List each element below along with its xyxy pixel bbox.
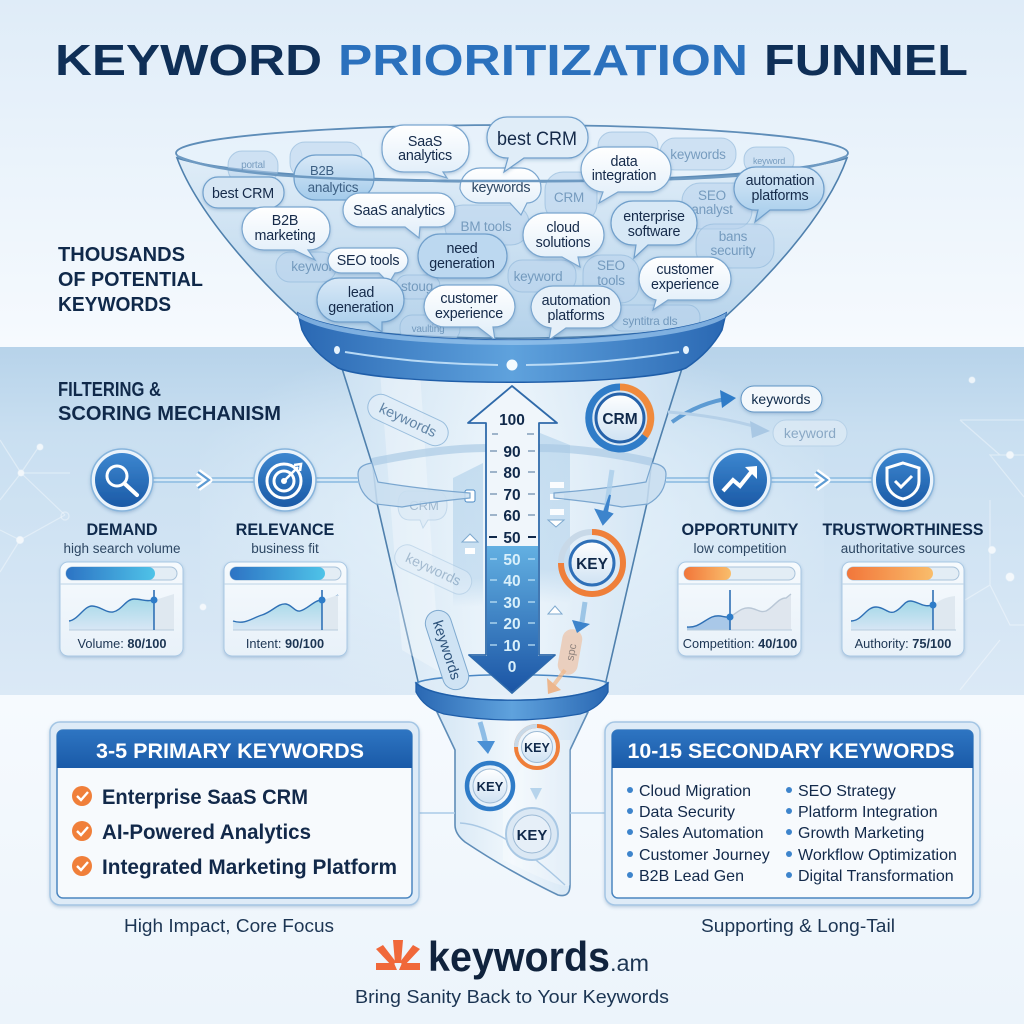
ring front left (358, 463, 470, 507)
CRM score badge: CRM (602, 411, 638, 428)
bubble: best CRM left (203, 177, 284, 208)
keyword list column two: Platform Integration (798, 804, 938, 821)
caption: primary: High Impact, Core Focus (124, 916, 334, 936)
pill: faded keyword (773, 420, 847, 446)
bubble: B2B analytics (behind rim): B2B (310, 163, 334, 178)
bubble: SEO tools: SEO (597, 258, 625, 273)
bubble: customer experience right (639, 257, 731, 310)
heading: TRUSTWORTHINESS (822, 521, 984, 539)
bubble: stoug: stoug (401, 279, 433, 294)
bubble: BM tools: BM tools (461, 219, 512, 234)
keyword list column one (627, 783, 770, 885)
heading: DEMAND (86, 521, 158, 539)
tag: orange pill: spc (565, 642, 579, 662)
decorative network background (0, 377, 1024, 690)
bubble: cloud solutions: solutions (536, 235, 590, 251)
caption: secondary: Supporting & Long-Tail (701, 916, 895, 936)
bubble: cloud solutions (523, 213, 604, 267)
bubble: SaaS analytics top: analytics (398, 148, 452, 164)
score scale double arrow: 20 (503, 616, 521, 633)
chevron arrow right (816, 472, 827, 488)
bubble: automation platforms: platforms (548, 308, 605, 324)
title: FUNNEL (764, 36, 968, 85)
bubble: SEO analyst (682, 183, 752, 229)
rim front arc (177, 156, 847, 181)
bubble: synthtra dls: syntitra dls (623, 314, 678, 328)
arrow: KEY down (572, 602, 590, 633)
bubble: data integration: integration (592, 168, 657, 184)
KEY score badge: KEY (576, 556, 609, 573)
bubble: keywor: keywor (291, 259, 333, 274)
tag: orange pill (556, 628, 584, 676)
ring back (372, 448, 652, 462)
bubble: B2B marketing: B2B (272, 213, 298, 229)
filter: trustworthiness (822, 449, 984, 656)
bubble: keyword: keyword (514, 269, 562, 284)
bubble: CRM: CRM (554, 190, 584, 205)
bubble: bans security (696, 224, 774, 268)
bubble: best CRM left: best CRM (212, 186, 274, 202)
bubble: customer experience (424, 285, 515, 340)
bubble: automation platforms (531, 286, 621, 340)
faded curved arrow (668, 412, 760, 428)
arrow: faded down (530, 788, 542, 800)
keyword list column one: Sales Automation (639, 825, 764, 842)
pill: keywords: keywords (751, 391, 811, 407)
metric card (224, 562, 347, 656)
heading: OPPORTUNITY (682, 521, 799, 539)
bubble: customer experience right: experience (651, 277, 719, 293)
bubble: customer experience: experience (435, 306, 503, 322)
bubble: enterprise software: software (628, 224, 680, 240)
bubble: need generation (418, 234, 507, 278)
icon: trend arrow (709, 449, 771, 511)
bubble: need generation: need (446, 241, 478, 257)
tag: keywords (364, 390, 452, 450)
tag: blue keywords: keywords (429, 619, 463, 682)
bubble: keywords (behind rim): keywords (472, 180, 530, 196)
panel header (612, 730, 973, 768)
badge: pale KEY: KEY (517, 827, 547, 844)
tag: keywords: keywords (376, 401, 439, 441)
bubble: SEO tools (328, 248, 408, 283)
tag: blue keywords (422, 607, 472, 693)
metric card (60, 562, 183, 656)
bubble: small bottom: vaulting (412, 324, 444, 335)
filter: opportunity (678, 449, 801, 656)
bubble: SaaS analytics top (382, 125, 469, 178)
bubble: data integration: data (610, 154, 638, 170)
tag: faded keywords: keywords (403, 549, 464, 589)
score scale double arrow: 100 (499, 412, 525, 429)
left heading: thousands of potential keywords: OF POTENTIAL (58, 268, 203, 291)
left heading: filtering and scoring mechanism: FILTERING & (58, 379, 161, 401)
bubble: synthtra dls (610, 305, 700, 331)
score scale double arrow: 10 (503, 638, 521, 655)
tagline: Bring Sanity Back to Your Keywords (355, 986, 669, 1007)
connector lines panels to spout (419, 812, 605, 814)
subtitle: authoritative sources (841, 541, 966, 556)
keyword list column one: Customer Journey (639, 847, 770, 864)
bubble: B2B analytics (behind rim): analytics (308, 180, 359, 195)
bubble: small top right: keyword (753, 156, 785, 166)
bubble: SaaS analytics top: SaaS (408, 134, 442, 150)
score scale double arrow: 30 (503, 595, 521, 612)
metric card: Authority: 75/100 (855, 636, 951, 651)
keyword list column two (786, 783, 957, 885)
bubble: keywords (behind rim) (460, 168, 541, 215)
bubble: SEO tools: tools (597, 273, 625, 288)
foreground keyword bubbles (203, 117, 824, 340)
bubble: SEO tools (583, 255, 639, 303)
subtitle: low competition (693, 541, 787, 556)
badge: orange KEY: KEY (524, 741, 551, 755)
chevron arrow left (198, 472, 209, 488)
bubble: customer experience: customer (440, 291, 498, 307)
tag: faded keywords (391, 541, 476, 598)
keyword list column one: Data Security (639, 804, 735, 821)
filter: relevance (224, 449, 347, 656)
bubble: BM tools (445, 205, 529, 245)
top blue collar (298, 313, 726, 382)
filter: demand (60, 449, 183, 656)
panel: secondary keywords (605, 722, 980, 905)
score scale double arrow: 80 (503, 465, 521, 482)
tilted keyword tags in tube (364, 390, 584, 693)
bubble: small back (598, 132, 658, 162)
title: KEYWORD (55, 36, 322, 85)
check item: Enterprise SaaS CRM: Enterprise SaaS CRM (102, 786, 308, 809)
check item: AI-Powered Analytics: AI-Powered Analytics (102, 821, 311, 844)
bottom collar (416, 675, 608, 720)
arrow: CRM to KEY (596, 470, 612, 524)
metric card: Competition: 40/100 (683, 636, 797, 651)
panel header: 10-15 SECONDARY KEYWORDS (628, 739, 954, 763)
bubble: keyword (508, 260, 576, 292)
logo (376, 933, 649, 980)
left heading: thousands of potential keywords: THOUSANDS (58, 243, 185, 266)
icon: magnifier (91, 449, 153, 511)
bubble: CRM (545, 172, 597, 222)
keywords output pills (668, 386, 847, 446)
bubble: B2B marketing: marketing (255, 228, 316, 244)
bubble: small bottom (400, 315, 460, 341)
CRM score badge (589, 387, 651, 449)
keyword list column two: Growth Marketing (798, 825, 924, 842)
bubble: keywor (276, 252, 336, 282)
tag: faded CRM bubble (398, 491, 447, 528)
subtitle: high search volume (63, 541, 181, 556)
spout KEY badges (467, 722, 558, 860)
bubble: stoug (396, 275, 440, 299)
check item: Integrated Marketing Platform: Integrated Marketing Platform (102, 856, 397, 879)
logo wordmark: keywords (428, 933, 610, 980)
panel: primary keywords (50, 722, 419, 905)
arrow: spout down (477, 722, 495, 754)
bubble: small back left: portal (241, 160, 265, 171)
score scale double arrow: 60 (503, 508, 521, 525)
heading: RELEVANCE (236, 521, 335, 539)
bubble: keywords (660, 138, 736, 170)
left heading: thousands of potential keywords: KEYWORDS (58, 293, 171, 316)
keyword list column two: Digital Transformation (798, 868, 954, 885)
keyword list column two: SEO Strategy (798, 783, 896, 800)
bubble: lead generation (317, 278, 404, 332)
bubble: SaaS analytics: SaaS analytics (353, 203, 445, 219)
subtitle: business fit (251, 541, 319, 556)
faded background keyword bubbles (228, 132, 794, 341)
funnel lower tube (340, 362, 684, 701)
icon: shield (872, 449, 934, 511)
panel header (57, 730, 412, 768)
keyword list column one: Cloud Migration (639, 783, 751, 800)
score scale double arrow: 40 (503, 573, 521, 590)
score scale double arrow (468, 386, 557, 693)
title (55, 36, 968, 85)
logo mark (376, 940, 420, 970)
score scale double arrow: 0 (508, 659, 516, 676)
pill: faded keyword: keyword (784, 425, 836, 441)
bubble: B2B marketing (242, 207, 330, 260)
bowl back rim (176, 125, 848, 181)
filter ring around tube (358, 448, 666, 507)
bubble: best CRM top (487, 117, 588, 172)
metric card (678, 562, 801, 656)
metric card: Volume: 80/100 (78, 636, 166, 651)
bubble: keywords: keywords (670, 147, 726, 162)
score scale double arrow: 50 (503, 552, 521, 569)
bubble: customer experience right: customer (656, 262, 714, 278)
panel header: 3-5 PRIMARY KEYWORDS (96, 739, 364, 763)
keyword list column one: B2B Lead Gen (639, 868, 744, 885)
score scale double arrow: 70 (503, 487, 521, 504)
bubble: automation platforms top right: automation (746, 173, 815, 189)
pill: keywords (741, 386, 822, 412)
ring front right (554, 463, 666, 507)
title: PRIORITIZATION (338, 36, 748, 85)
bubble: B2B analytics (behind rim) (294, 155, 374, 200)
left heading: filtering and scoring mechanism (58, 379, 281, 425)
bubble: lead generation: generation (328, 300, 394, 316)
bubble: bans security: security (711, 243, 756, 258)
bubble: best CRM top: best CRM (497, 129, 577, 150)
bubble: small back left (228, 151, 278, 183)
bubble: automation platforms: automation (542, 293, 611, 309)
metric card: Intent: 90/100 (246, 636, 324, 651)
bubble: enterprise software (611, 201, 697, 258)
icon: target (254, 449, 316, 511)
score scale double arrow: 50 (503, 530, 521, 547)
bubble: SEO analyst: analyst (691, 202, 733, 217)
left heading: thousands of potential keywords (58, 243, 203, 316)
curved arrow to keywords (672, 398, 732, 422)
bubble: cloud solutions: cloud (546, 220, 580, 236)
bubble: small top right (744, 147, 794, 173)
bubble: automation platforms top right: platforms (752, 188, 809, 204)
logo suffix: .am (610, 950, 649, 976)
bubble: lead generation: lead (348, 285, 374, 301)
badge: blue KEY: KEY (477, 779, 504, 794)
bubble: SEO tools: SEO tools (337, 253, 399, 269)
tag: faded CRM bubble: CRM (409, 498, 439, 513)
left heading: filtering and scoring mechanism: SCORING MECHANISM (58, 403, 281, 425)
keyword list column two: Workflow Optimization (798, 847, 957, 864)
spout (437, 712, 588, 896)
bubble: small back center (290, 142, 362, 178)
bubble: need generation: generation (429, 256, 495, 272)
KEY score badge (561, 532, 623, 594)
bubble: SEO analyst: SEO (698, 188, 726, 203)
collar rivets (334, 346, 340, 354)
funnel upper bowl (176, 125, 848, 338)
bubble: SaaS analytics (343, 193, 455, 238)
bubble: enterprise software: enterprise (623, 209, 685, 225)
bubble: data integration (581, 147, 671, 203)
arrow: orange exit (547, 670, 565, 694)
bubble: automation platforms top right (734, 167, 824, 222)
metric card (842, 562, 964, 656)
translucent side strips (453, 463, 483, 607)
bubble: bans security: bans (719, 229, 748, 244)
score scale double arrow: 90 (503, 444, 521, 461)
connector row lines (150, 472, 875, 488)
